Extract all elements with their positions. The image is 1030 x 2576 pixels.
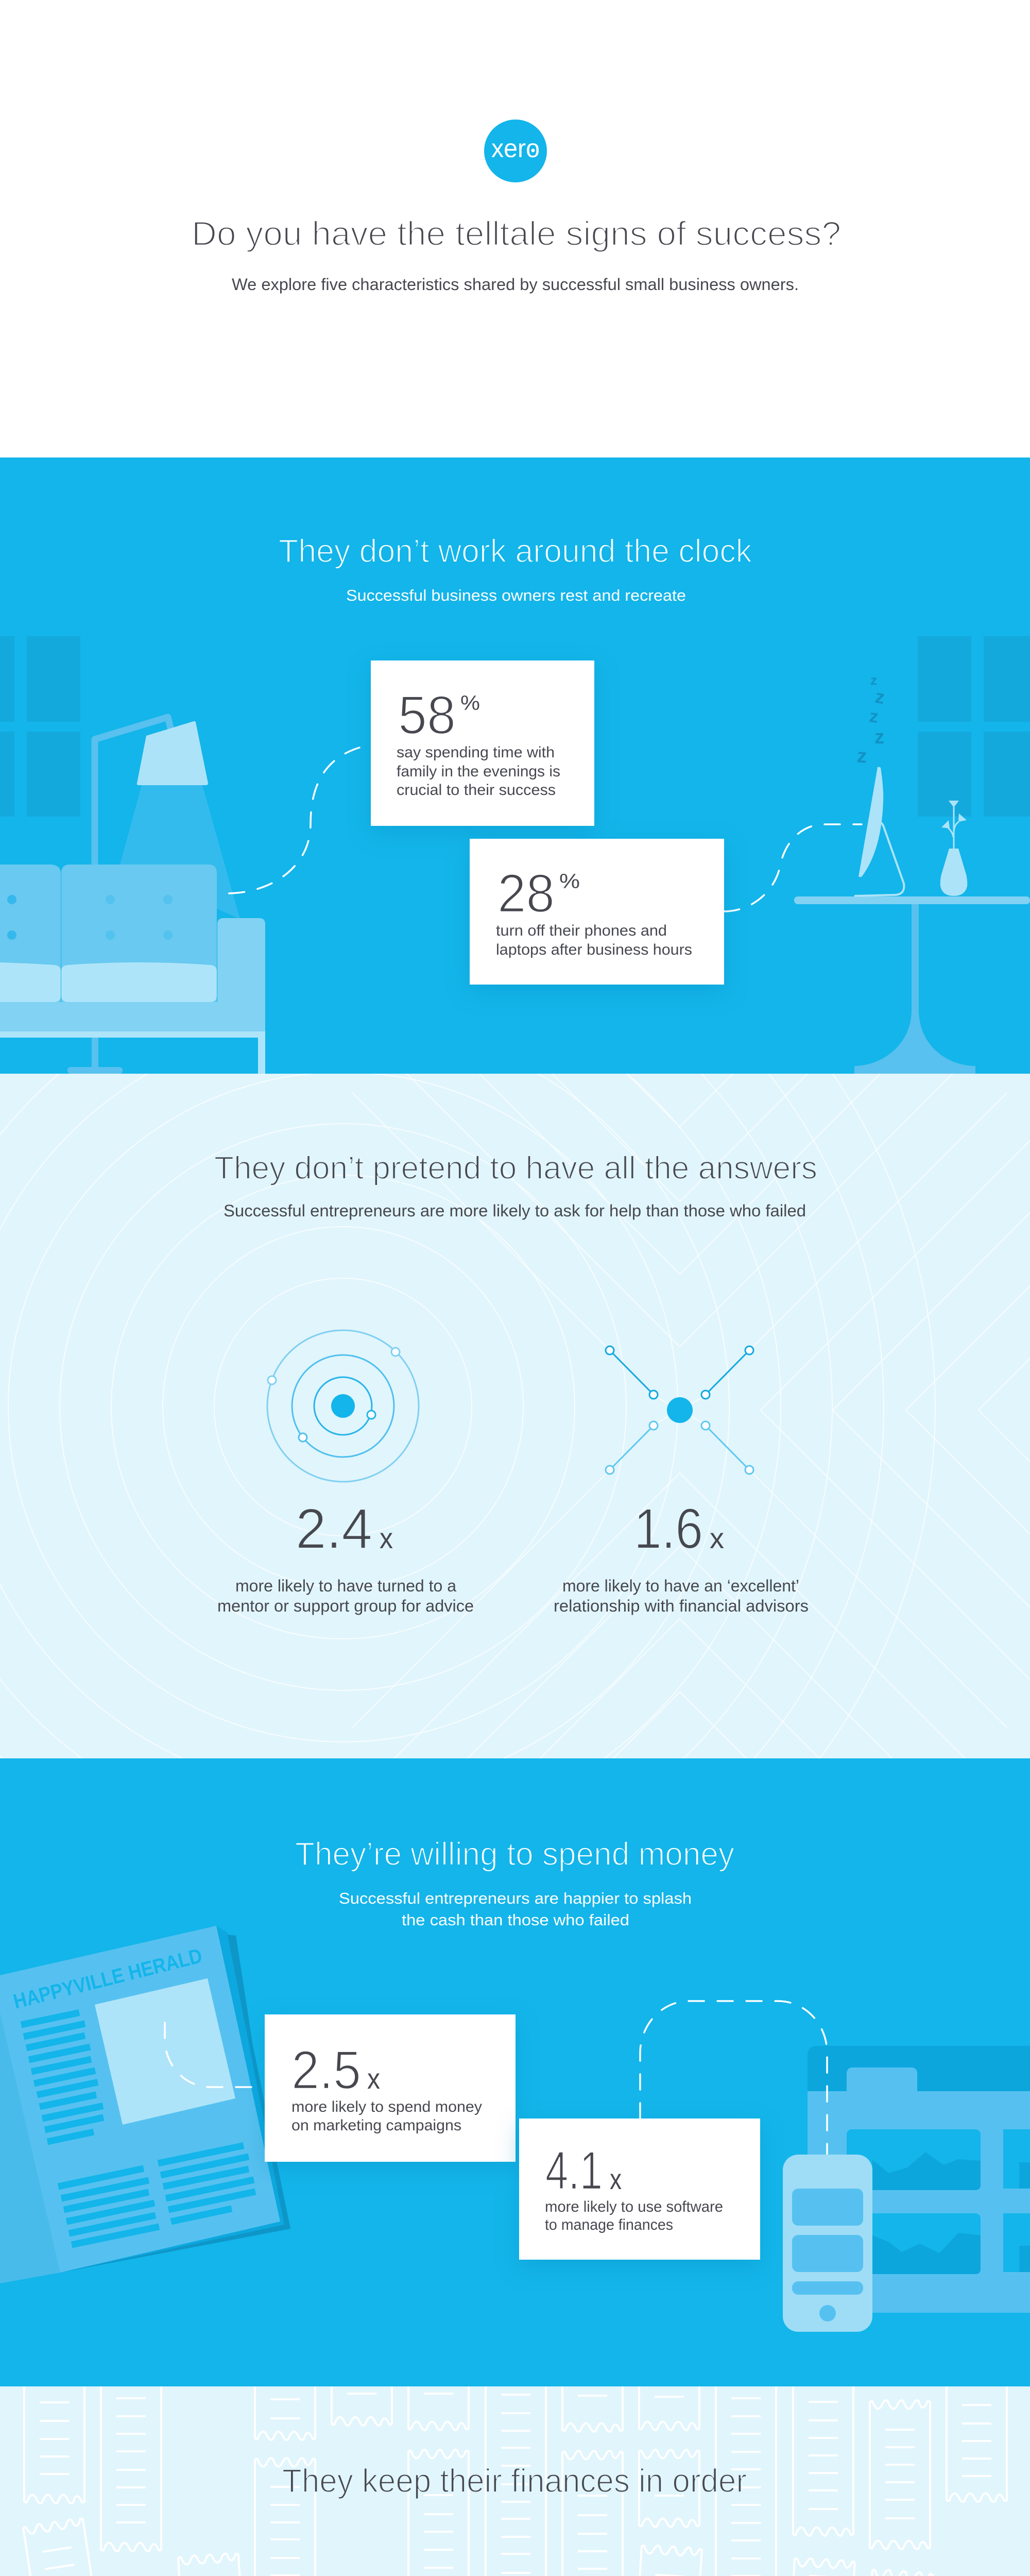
stat card: 2.5x: on marketing campaigns <box>291 2117 461 2134</box>
icon: snoring z letters <box>856 672 886 768</box>
illustration: floor lamp <box>67 717 240 1074</box>
panel: they don't pretend to have all the answers <box>0 1074 1030 1758</box>
illustration: side table <box>794 896 1030 1074</box>
stat: 2.4x: more likely to have turned to a <box>235 1577 456 1595</box>
stat: 1.6x: 1.6 <box>634 1497 703 1561</box>
illustration: vase with plant <box>940 801 967 896</box>
stat card: 28 percent: laptops after business hours <box>496 941 692 958</box>
stat card: 2.5x: x <box>367 2062 380 2095</box>
title: Do you have the telltale signs of success? <box>192 214 841 252</box>
illustration: newspaper <box>0 1926 290 2283</box>
background rings and chevrons <box>0 1074 1030 1758</box>
illustration: newspaper: HAPPYVILLE HERALD <box>11 1944 204 2013</box>
stat card: 4.1x <box>519 2119 760 2260</box>
stat card: 58 percent: crucial to their success <box>397 782 556 799</box>
stat: 1.6x: more likely to have an ‘excellent’ <box>562 1577 799 1595</box>
stat card: 28 percent: % <box>559 870 580 893</box>
stat card: 4.1x: to manage finances <box>545 2216 673 2233</box>
heading: They don’t pretend to have all the answers <box>214 1150 817 1186</box>
stat card: 58 percent: 58 <box>398 685 456 745</box>
arrow: dashed connector newspaper to card <box>165 2023 253 2087</box>
subheading: Successful entrepreneurs are more likely to ask for help than those who failed <box>224 1201 806 1220</box>
stat: 1.6x: relationship with financial advisors <box>554 1597 809 1615</box>
arrow: dashed connector card to phone <box>640 2001 827 2154</box>
stat: 2.4x: 2.4 <box>296 1497 372 1561</box>
stat card: 28 percent: 28 <box>497 863 555 924</box>
icon: snoring z letters: z <box>856 745 868 768</box>
stat card: 2.5x: more likely to spend money <box>291 2098 482 2115</box>
arrow: dashed connector lamp to card <box>227 748 359 893</box>
subheading <box>339 1889 692 1929</box>
stat card: 58 percent: say spending time with <box>397 744 555 761</box>
icon: snoring z letters: z <box>868 706 880 727</box>
panel: intro header <box>192 120 841 294</box>
icon: snoring z letters: z <box>873 686 886 708</box>
stat card: 2.5x: 2.5 <box>291 2040 361 2100</box>
icon: orbit rings <box>267 1330 419 1482</box>
stat card: 58 percent: % <box>460 692 480 715</box>
icon: snoring z letters: z <box>870 672 877 688</box>
stat card: 4.1x: x <box>610 2163 622 2195</box>
subheading: the cash than those who failed <box>402 1911 629 1929</box>
panel: they keep their finances in order <box>0 2386 1030 2576</box>
stat card: 4.1x: more likely to use software <box>545 2198 723 2215</box>
windows right <box>918 636 1030 817</box>
stat card: 28 percent: turn off their phones and <box>496 922 667 939</box>
panel: they're willing to spend money <box>0 1758 1030 2386</box>
icon: snoring z letters: z <box>874 726 884 748</box>
heading: They don’t work around the clock <box>279 533 752 569</box>
stat card: 4.1x: 4.1 <box>545 2141 603 2201</box>
illustration: sleeping monitor <box>854 767 904 896</box>
stat card: 28 percent <box>470 839 724 985</box>
windows left <box>0 636 80 817</box>
illustration: sofa <box>0 865 265 1074</box>
stat card: 58 percent <box>371 660 594 826</box>
stat: 2.4x: mentor or support group for advice <box>217 1597 474 1615</box>
stat: 1.6x <box>554 1497 809 1615</box>
icon: network cross <box>606 1346 753 1474</box>
illustration: dashboard window <box>808 2046 1030 2313</box>
icon: xero logo: xero <box>491 134 540 163</box>
heading: They keep their finances in order <box>282 2462 747 2499</box>
stat: 2.4x <box>217 1497 474 1615</box>
icon: xero logo <box>484 120 547 182</box>
stat card: 58 percent: family in the evenings is <box>397 763 560 780</box>
subheading: Successful entrepreneurs are happier to splash <box>339 1889 692 1907</box>
background falling receipts <box>23 2386 1009 2576</box>
stat card: 2.5x <box>265 2014 516 2162</box>
heading: They’re willing to spend money <box>295 1836 734 1872</box>
stat: 2.4x: x <box>380 1522 393 1554</box>
subheading: Successful business owners rest and recreate <box>346 586 686 604</box>
intro text: We explore five characteristics shared by successful small business owners. <box>232 275 799 294</box>
panel: they don't work around the clock <box>0 457 1030 1074</box>
illustration: phone <box>783 2155 872 2332</box>
stat: 1.6x: x <box>710 1522 724 1554</box>
arrow: dashed connector card to monitor <box>724 824 862 911</box>
